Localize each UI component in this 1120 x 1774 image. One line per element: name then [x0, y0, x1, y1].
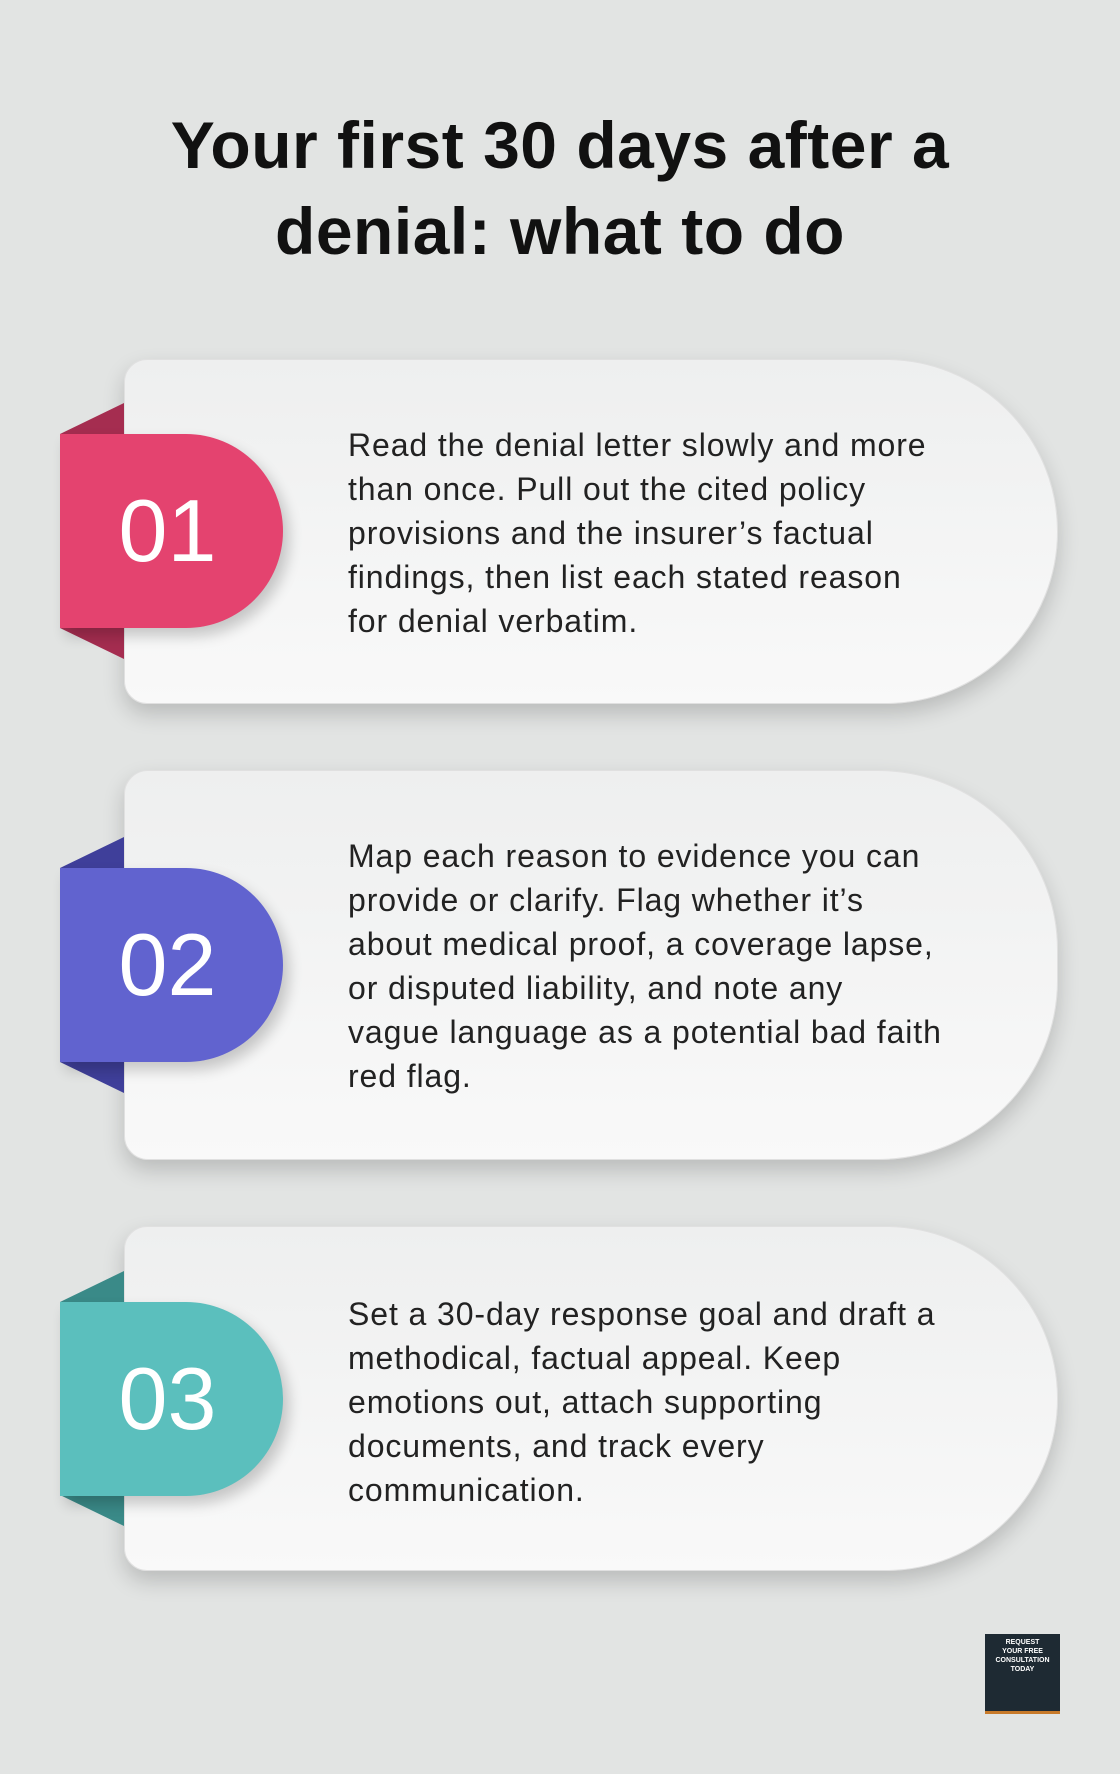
text 1: than once. Pull out the cited policy	[348, 471, 866, 507]
logo: consultation badge: CONSULTATION	[995, 1657, 1050, 1664]
text 3: Set a 30-day response goal and draft a	[348, 1296, 935, 1332]
badge 02	[60, 868, 283, 1062]
title	[171, 108, 950, 268]
step 2	[60, 771, 1067, 1179]
logo: consultation badge: REQUEST	[1006, 1639, 1039, 1646]
fold bottom 2	[60, 1062, 124, 1093]
text 3: documents, and track every	[348, 1428, 764, 1464]
badge 01: 01	[119, 481, 216, 580]
badge 02: 02	[119, 915, 216, 1014]
text 2	[348, 838, 942, 1094]
text 2: red flag.	[348, 1058, 472, 1094]
text 1: findings, then list each stated reason	[348, 559, 902, 595]
text 2: provide or clarify. Flag whether it’s	[348, 882, 864, 918]
card 3	[124, 1226, 1058, 1571]
logo: consultation badge: TODAY	[1011, 1666, 1034, 1673]
text 3: methodical, factual appeal. Keep	[348, 1340, 841, 1376]
text 1: Read the denial letter slowly and more	[348, 427, 926, 463]
step 1	[60, 360, 1067, 723]
text 3	[348, 1296, 935, 1508]
text 2: vague language as a potential bad faith	[348, 1014, 942, 1050]
text 3: emotions out, attach supporting	[348, 1384, 822, 1420]
fold top 3	[60, 1271, 124, 1302]
title: denial: what to do	[275, 194, 845, 268]
title: Your first 30 days after a	[171, 108, 949, 182]
fold top 1	[60, 403, 124, 434]
text 2: or disputed liability, and note any	[348, 970, 843, 1006]
badge 03: 03	[119, 1349, 216, 1448]
card 2	[124, 770, 1058, 1160]
badge 03	[60, 1302, 283, 1496]
step 3	[60, 1227, 1067, 1590]
fold bottom 1	[60, 628, 124, 659]
text 2: about medical proof, a coverage lapse,	[348, 926, 934, 962]
logo: consultation badge: YOUR FREE	[1002, 1648, 1043, 1655]
text 1: for denial verbatim.	[348, 603, 638, 639]
text 2: Map each reason to evidence you can	[348, 838, 920, 874]
text 1	[348, 427, 926, 639]
fold top 2	[60, 837, 124, 868]
text 3: communication.	[348, 1472, 585, 1508]
text 1: provisions and the insurer’s factual	[348, 515, 874, 551]
badge 01	[60, 434, 283, 628]
card 1	[124, 359, 1058, 704]
logo: consultation badge	[985, 1634, 1060, 1714]
fold bottom 3	[60, 1495, 124, 1526]
